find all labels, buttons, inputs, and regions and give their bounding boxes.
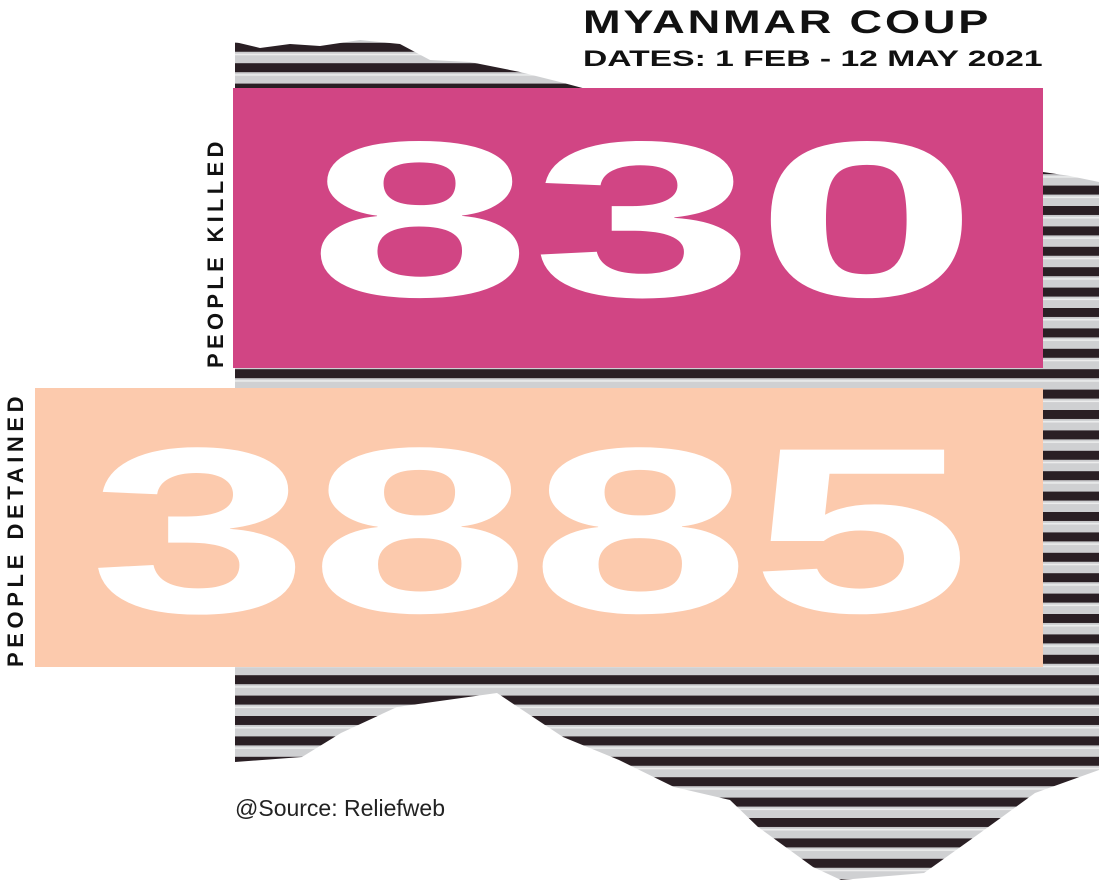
panel: people detained	[35, 388, 1043, 667]
panel: people killed	[233, 88, 1043, 368]
subtitle: dates: DATES: 1 FEB - 12 MAY 2021	[583, 46, 1043, 71]
number 3885: 3885	[89, 399, 971, 663]
label: people killed: PEOPLE KILLED	[203, 137, 228, 368]
number 830: 830	[308, 96, 978, 344]
source text: @Source: Reliefweb	[235, 795, 445, 821]
title: MYANMAR COUP	[583, 4, 991, 40]
label: people detained: PEOPLE DETAINED	[3, 392, 28, 667]
